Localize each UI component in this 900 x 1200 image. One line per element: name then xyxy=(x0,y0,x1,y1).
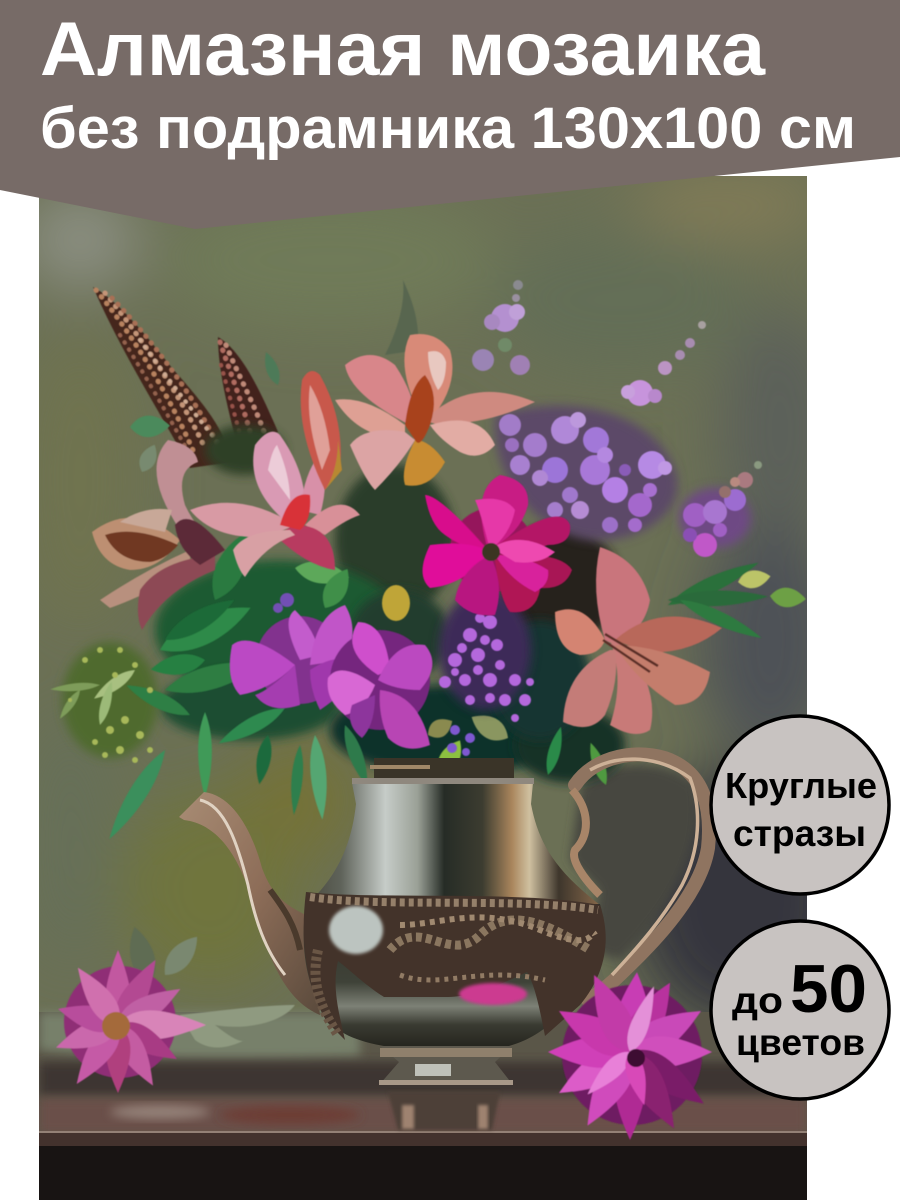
dark wall seen through the handle xyxy=(570,765,697,960)
badge: up to 50 colours: цветов xyxy=(736,1022,865,1063)
body xyxy=(304,904,604,1046)
badge: round rhinestones xyxy=(711,716,889,894)
badge: up to 50 colours: 50 xyxy=(790,951,867,1027)
foot xyxy=(384,1057,509,1080)
lily bud xyxy=(301,371,342,490)
subtitle: без подрамника 130х100 см xyxy=(40,96,856,161)
badge: round rhinestones: Круглые xyxy=(725,765,877,806)
brown flower spikes xyxy=(93,280,418,468)
table top xyxy=(39,1012,807,1200)
painting: floral still life with teapot xyxy=(20,170,850,1200)
purple lilac sprays xyxy=(273,280,762,756)
badge: up to 50 colours: до xyxy=(732,980,783,1021)
badge: up to 50 colours xyxy=(711,921,889,1099)
fallen flower: left xyxy=(52,924,295,1093)
lily: right xyxy=(555,547,722,734)
fallen flower: right xyxy=(548,968,713,1140)
dark gaps and mauve haze behind the lilac xyxy=(495,406,678,540)
neck xyxy=(306,783,600,905)
badge: round rhinestones: стразы xyxy=(733,813,866,854)
violet-pink blooms in centre-left xyxy=(230,605,432,749)
lily: far left xyxy=(92,440,225,630)
cosmos flower xyxy=(422,475,572,615)
foliage masses xyxy=(62,425,625,783)
handle xyxy=(575,754,709,1000)
chased ornament band xyxy=(304,892,606,1040)
green leaves xyxy=(50,350,807,844)
teapot xyxy=(179,754,709,1130)
spout xyxy=(179,792,320,1015)
painted background wash xyxy=(39,176,807,1012)
title: Алмазная мозаика xyxy=(40,7,766,92)
header banner xyxy=(0,0,900,229)
lily: top centre xyxy=(335,334,535,490)
lily: left pink xyxy=(190,432,360,577)
